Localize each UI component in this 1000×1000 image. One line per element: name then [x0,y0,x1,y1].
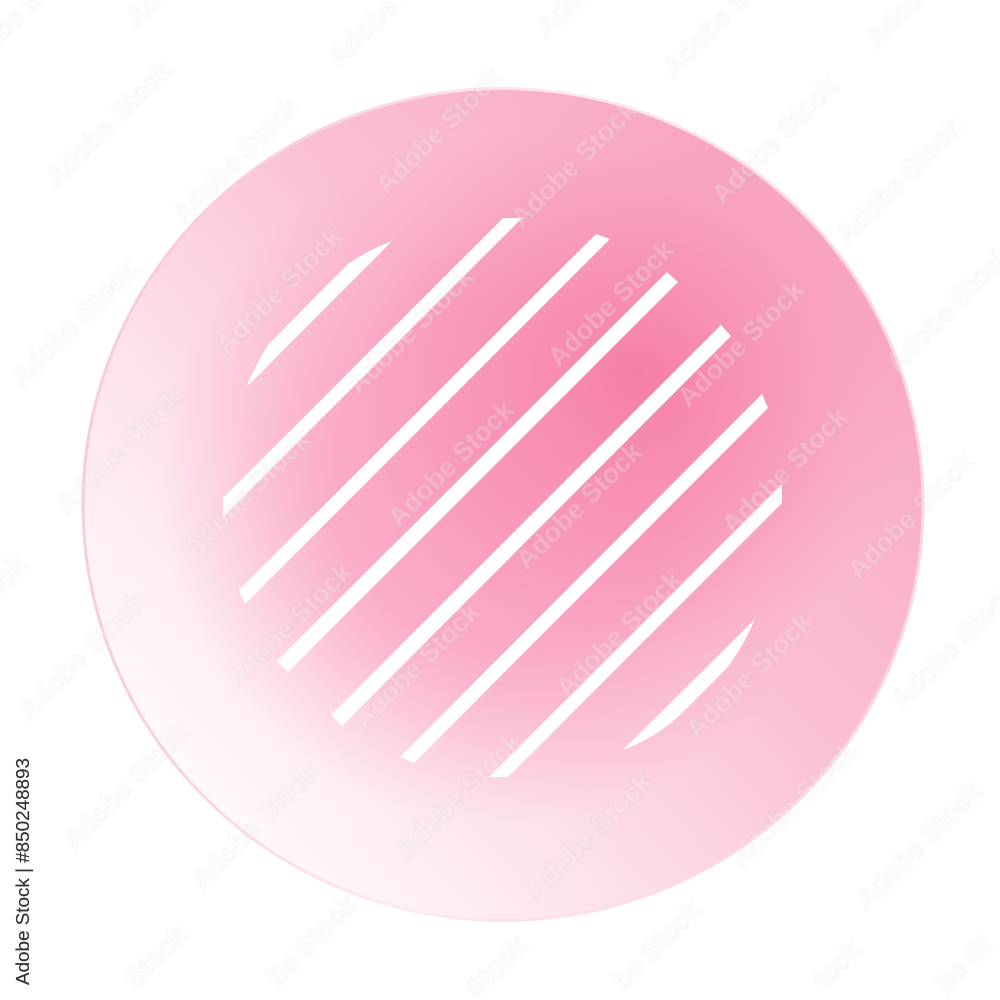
watermark pattern: Adobe Stock [342,261,480,400]
watermark pattern: Adobe Stock [58,716,196,855]
watermark pattern: be Stock [606,894,708,996]
watermark pattern: Adobe Stock [520,766,658,905]
watermark pattern: Adobe Stock [210,221,348,360]
watermark pattern: Adobe Stock [50,381,188,520]
watermark pattern: Adobe Stock [672,274,810,413]
diagonal white stripes [223,218,782,777]
watermark pattern: Adobe Stock [40,54,178,193]
watermark pattern: be St [930,930,998,998]
watermark pattern: Adobe Stock [186,756,324,895]
watermark pattern: Stock [119,919,193,993]
watermark pattern: Adobe Stock [382,394,520,533]
watermark pattern: Adobe Stock [842,446,980,585]
watermark pattern: Adobe Stock [220,556,358,695]
watermark pattern: Adobe Stock [830,111,968,250]
watermark pattern: Adobe Stock [167,91,305,230]
watermark pattern: Adobe Stock [178,424,316,563]
watermark pattern: be Stock [261,889,363,991]
watermark pattern: Adobe Stock [550,564,688,703]
watermark pattern: Adobe Stock [370,61,508,200]
stock id label: Adobe Stock | #850248893 [12,758,33,985]
watermark pattern: Adobe Stock [390,726,528,865]
watermark pattern: tock [807,934,868,996]
watermark pattern: Adobe Stock [348,596,486,735]
watermark pattern: Adobe Stock [680,606,818,745]
watermark pattern: Adobe Stock [13,586,151,725]
watermark pattern: Adobe Stock [716,401,854,540]
watermark pattern: Adobe Stock [725,734,863,873]
circle background [82,88,924,922]
watermark pattern: Adobe Stock [510,436,648,575]
watermark pattern: Adobe Stock [850,776,988,915]
watermark pattern: Adobe Stock [505,94,643,233]
watermark pattern: Adobe Stock [706,71,844,210]
watermark pattern: Adobe Stock [5,254,143,393]
watermark pattern: Adobe Stock [542,234,680,373]
